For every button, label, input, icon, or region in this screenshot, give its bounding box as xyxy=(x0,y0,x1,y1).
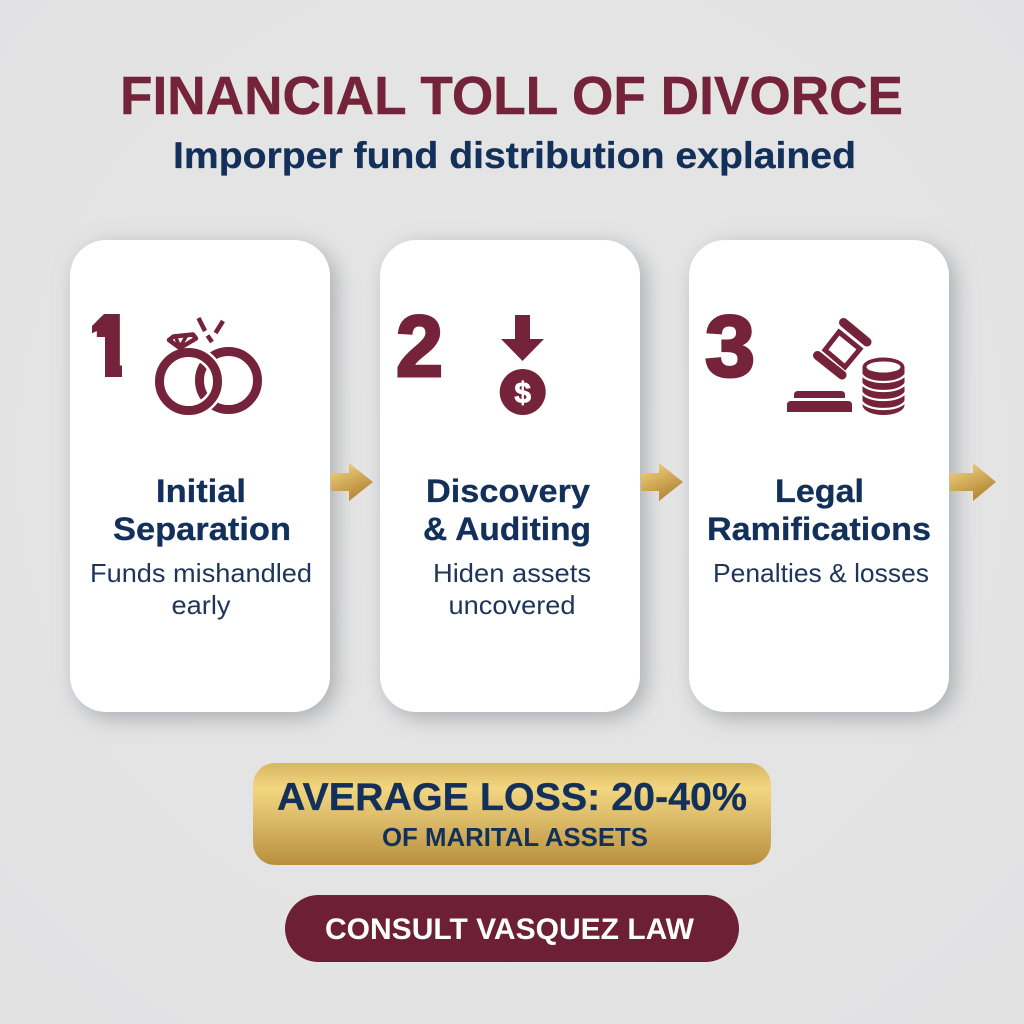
callout caption: OF MARITAL ASSETS xyxy=(382,822,648,852)
heading line 2: Ramifications xyxy=(707,511,931,547)
description: step 1 xyxy=(90,558,312,620)
callout: average loss xyxy=(253,763,771,865)
icon: wedding rings xyxy=(160,318,258,410)
description: step 2: uncovered xyxy=(448,590,576,620)
heading: legal ramifications: Legal xyxy=(775,473,864,509)
step number 1: 1 xyxy=(72,297,138,396)
arrow: step 2 to 3 xyxy=(641,463,683,501)
heading line 2: & Auditing xyxy=(423,511,591,547)
icon: down arrow and dollar coin xyxy=(500,315,546,415)
panel: step 3 legal ramifications xyxy=(689,240,949,712)
subtitle: Imporper fund distribution explained xyxy=(173,135,856,176)
arrow: step 1 to 2 xyxy=(331,463,373,501)
callout figure: AVERAGE LOSS: 20-40% xyxy=(277,776,747,819)
heading: discovery and auditing: Discovery xyxy=(426,473,590,509)
description: step 3: Penalties & losses xyxy=(713,558,929,588)
icon: gavel and coin stack xyxy=(787,322,906,415)
panel: step 1 initial separation xyxy=(70,240,330,712)
heading line 2: Separation xyxy=(113,511,291,547)
description: step 1: Funds mishandled xyxy=(90,558,312,588)
button: consult vasquez law: CONSULT VASQUEZ LAW xyxy=(325,913,695,946)
step number 2: 2 xyxy=(396,299,443,395)
description: step 2: Hiden assets xyxy=(433,558,591,588)
button: consult vasquez law xyxy=(285,895,739,962)
title: FINANCIAL TOLL OF DIVORCE xyxy=(120,66,903,126)
panel: step 2 discovery and auditing xyxy=(380,240,640,712)
description: step 2 xyxy=(433,558,591,620)
description: step 1: early xyxy=(172,590,230,620)
icon: down arrow and dollar coin: $ xyxy=(514,377,531,410)
step number 3: 3 xyxy=(705,299,755,395)
arrow: step 3 onward xyxy=(950,463,996,501)
heading: initial separation: Initial xyxy=(156,473,246,509)
